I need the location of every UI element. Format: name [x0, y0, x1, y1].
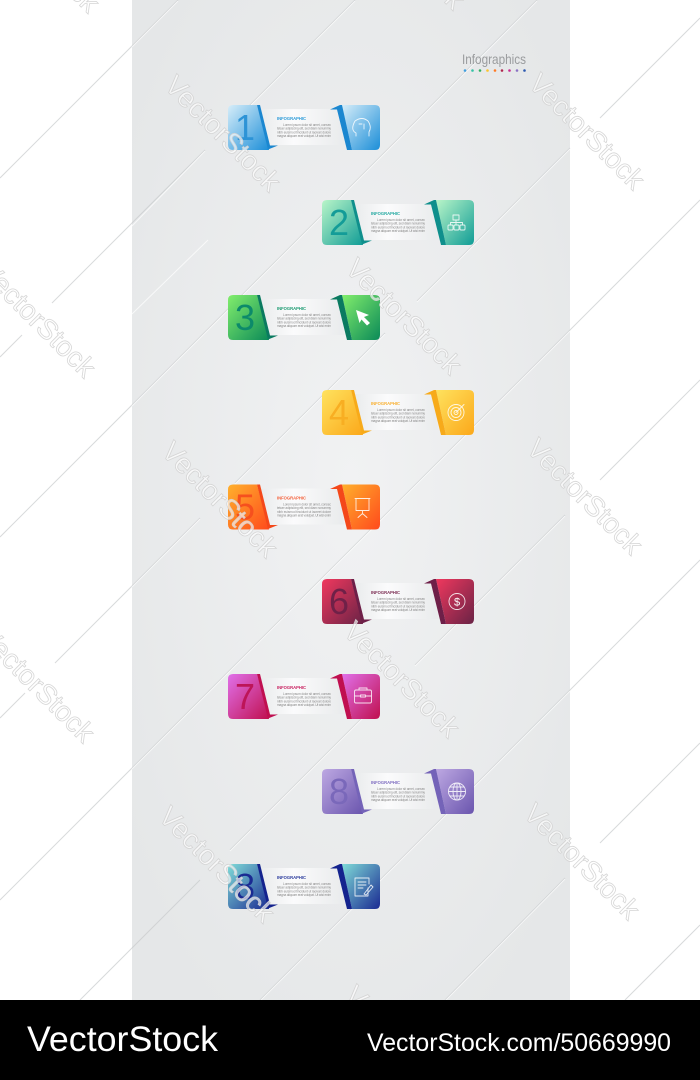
icon: target	[448, 404, 464, 420]
step 8	[322, 769, 474, 814]
step 9	[228, 864, 380, 909]
number: 8	[235, 866, 255, 907]
body text: tetuer adipiscing elit, sed diam nonummy	[277, 506, 331, 510]
background panel	[132, 0, 570, 1000]
tab fold	[257, 295, 278, 340]
number tab	[322, 390, 363, 435]
heading: INFOGRAPHIC	[277, 306, 307, 311]
body text	[277, 882, 331, 897]
body text: nibh euismod tincidunt ut laoreet dolore	[371, 604, 425, 608]
text card	[354, 583, 438, 619]
footer logo: VectorStock	[27, 1020, 219, 1059]
step 5	[228, 484, 380, 530]
header: Infographics: Infographics	[462, 51, 526, 67]
body text	[277, 502, 331, 518]
icon panel	[342, 105, 380, 150]
tab fold	[351, 579, 372, 624]
body text: Lorem ipsum dolor sit amet, consec	[283, 502, 331, 506]
tab fold	[351, 769, 372, 814]
heading: INFOGRAPHIC	[371, 590, 401, 595]
number: 2	[329, 202, 349, 243]
body text: nibh euismod tincidunt ut laoreet dolore	[277, 130, 331, 134]
step 4	[322, 390, 474, 435]
tab fold	[351, 390, 372, 434]
number: 5	[235, 486, 255, 528]
heading: INFOGRAPHIC	[371, 211, 401, 216]
icon fold	[424, 579, 446, 624]
footer url: VectorStock.com/50669990	[367, 1029, 671, 1057]
number: 3	[235, 297, 255, 338]
body text	[277, 313, 331, 328]
body text	[371, 787, 425, 802]
heading: INFOGRAPHIC	[371, 780, 401, 785]
tab fold	[257, 864, 278, 908]
tab fold	[257, 674, 278, 718]
body text	[371, 408, 425, 423]
number tab	[228, 105, 269, 150]
icon fold	[424, 200, 446, 245]
body text: nibh euismod tincidunt ut laoreet dolore	[277, 320, 331, 324]
body text: Lorem ipsum dolor sit amet, consec	[377, 218, 425, 222]
body text	[277, 123, 331, 138]
icon: globe	[448, 783, 466, 800]
body text: magna aliquam erat volutpat. Ut wisi enim	[277, 893, 331, 897]
number: 1	[235, 107, 255, 148]
icon panel	[342, 295, 380, 340]
watermarks: VectorStock	[159, 69, 287, 198]
number tab	[228, 864, 269, 909]
text card	[354, 204, 438, 240]
icon fold	[330, 295, 352, 340]
body text: tetuer adipiscing elit, sed diam nonummy	[277, 316, 331, 320]
text card	[354, 773, 438, 809]
number: 8	[329, 771, 349, 812]
watermarks: VectorStock	[518, 797, 646, 926]
body text: magna aliquam erat volutpat. Ut wisi enim	[277, 324, 331, 328]
heading: INFOGRAPHIC	[277, 875, 307, 880]
step 2	[322, 200, 474, 245]
icon panel	[342, 674, 380, 719]
icon fold	[330, 105, 352, 150]
body text: tetuer adipiscing elit, sed diam nonummy	[371, 412, 425, 416]
body text: magna aliquam erat volutpat. Ut wisi enim	[277, 134, 331, 138]
number tab	[322, 579, 363, 624]
icon: presentation board	[355, 498, 370, 518]
text card	[260, 868, 344, 904]
number: 7	[235, 676, 255, 717]
tab fold	[351, 200, 372, 244]
watermarks: VectorStock	[340, 252, 468, 381]
icon: dollar coin	[449, 594, 465, 610]
watermarks: VectorStock	[153, 800, 281, 929]
tab fold	[257, 105, 278, 150]
body text: tetuer adipiscing elit, sed diam nonummy	[371, 600, 425, 604]
heading: INFOGRAPHIC	[277, 116, 307, 121]
heading: INFOGRAPHIC	[277, 685, 307, 690]
body text: tetuer adipiscing elit, sed diam nonummy	[277, 886, 331, 890]
body text: nibh euismod tincidunt ut laoreet dolore	[371, 416, 425, 420]
body text: Lorem ipsum dolor sit amet, consec	[283, 882, 331, 886]
body text	[371, 218, 425, 233]
step 1	[228, 105, 380, 150]
body text: tetuer adipiscing elit, sed diam nonummy	[277, 696, 331, 700]
body text: magna aliquam erat volutpat. Ut wisi enim	[371, 229, 425, 233]
icon: briefcase	[354, 688, 372, 703]
tab fold	[257, 484, 278, 529]
text card	[354, 394, 438, 430]
text card	[260, 488, 344, 524]
body text: nibh euismod tincidunt ut laoreet dolore	[371, 794, 425, 798]
number: 4	[329, 392, 349, 433]
icon fold	[330, 864, 352, 909]
watermarks: VectorStock	[338, 615, 466, 744]
icon panel	[436, 390, 474, 435]
heading: INFOGRAPHIC	[277, 496, 307, 500]
watermarks: VectorStock	[156, 435, 284, 564]
body text: Lorem ipsum dolor sit amet, consec	[283, 313, 331, 317]
icon panel	[342, 864, 380, 909]
number tab	[228, 484, 269, 530]
body text: magna aliquam erat volutpat. Ut wisi enim	[277, 514, 331, 518]
body text: Lorem ipsum dolor sit amet, consec	[283, 692, 331, 696]
icon fold	[424, 769, 446, 814]
number tab	[322, 769, 363, 814]
number tab	[228, 295, 269, 340]
icon: head	[353, 118, 370, 136]
icon panel	[342, 484, 380, 530]
body text: Lorem ipsum dolor sit amet, consec	[283, 123, 331, 127]
body text: nibh euismod tincidunt ut laoreet dolore	[371, 226, 425, 230]
body text: Lorem ipsum dolor sit amet, consec	[377, 408, 425, 412]
icon fold	[330, 674, 352, 719]
text card	[260, 299, 344, 335]
icon: dollar coin: $	[454, 596, 460, 608]
body text	[277, 692, 331, 707]
text card	[260, 109, 344, 145]
icon: network	[448, 215, 465, 230]
step 6	[322, 579, 474, 624]
body text: nibh euismod tincidunt ut laoreet dolore	[277, 890, 331, 894]
icon fold	[424, 390, 446, 435]
icon panel	[436, 200, 474, 245]
heading: INFOGRAPHIC	[371, 401, 401, 406]
body text: nibh euismod tincidunt ut laoreet dolore	[277, 700, 331, 704]
number tab	[322, 200, 363, 245]
watermarks: VectorStock	[521, 432, 649, 561]
icon fold	[330, 484, 352, 530]
body text: magna aliquam erat volutpat. Ut wisi enim	[371, 419, 425, 423]
step 3	[228, 295, 380, 340]
text card	[260, 678, 344, 714]
header: Infographics	[462, 51, 526, 72]
body text: tetuer adipiscing elit, sed diam nonummy	[371, 222, 425, 226]
number tab	[228, 674, 269, 719]
footer bar	[0, 1000, 700, 1080]
body text: nibh euismod tincidunt ut laoreet dolore	[277, 510, 331, 514]
number: 6	[329, 581, 349, 622]
body text: magna aliquam erat volutpat. Ut wisi enim	[277, 703, 331, 707]
body text: tetuer adipiscing elit, sed diam nonummy	[371, 790, 425, 794]
body text	[371, 597, 425, 612]
step 7	[228, 674, 380, 719]
body text: Lorem ipsum dolor sit amet, consec	[377, 597, 425, 601]
icon panel	[436, 579, 474, 624]
body text: magna aliquam erat volutpat. Ut wisi enim	[371, 798, 425, 802]
body text: Lorem ipsum dolor sit amet, consec	[377, 787, 425, 791]
watermarks: VectorStock	[523, 67, 651, 196]
body text: magna aliquam erat volutpat. Ut wisi enim	[371, 608, 425, 612]
icon: document and pen	[355, 878, 373, 896]
body text: tetuer adipiscing elit, sed diam nonummy	[277, 126, 331, 130]
icon panel	[436, 769, 474, 814]
icon: cursor	[356, 310, 370, 326]
